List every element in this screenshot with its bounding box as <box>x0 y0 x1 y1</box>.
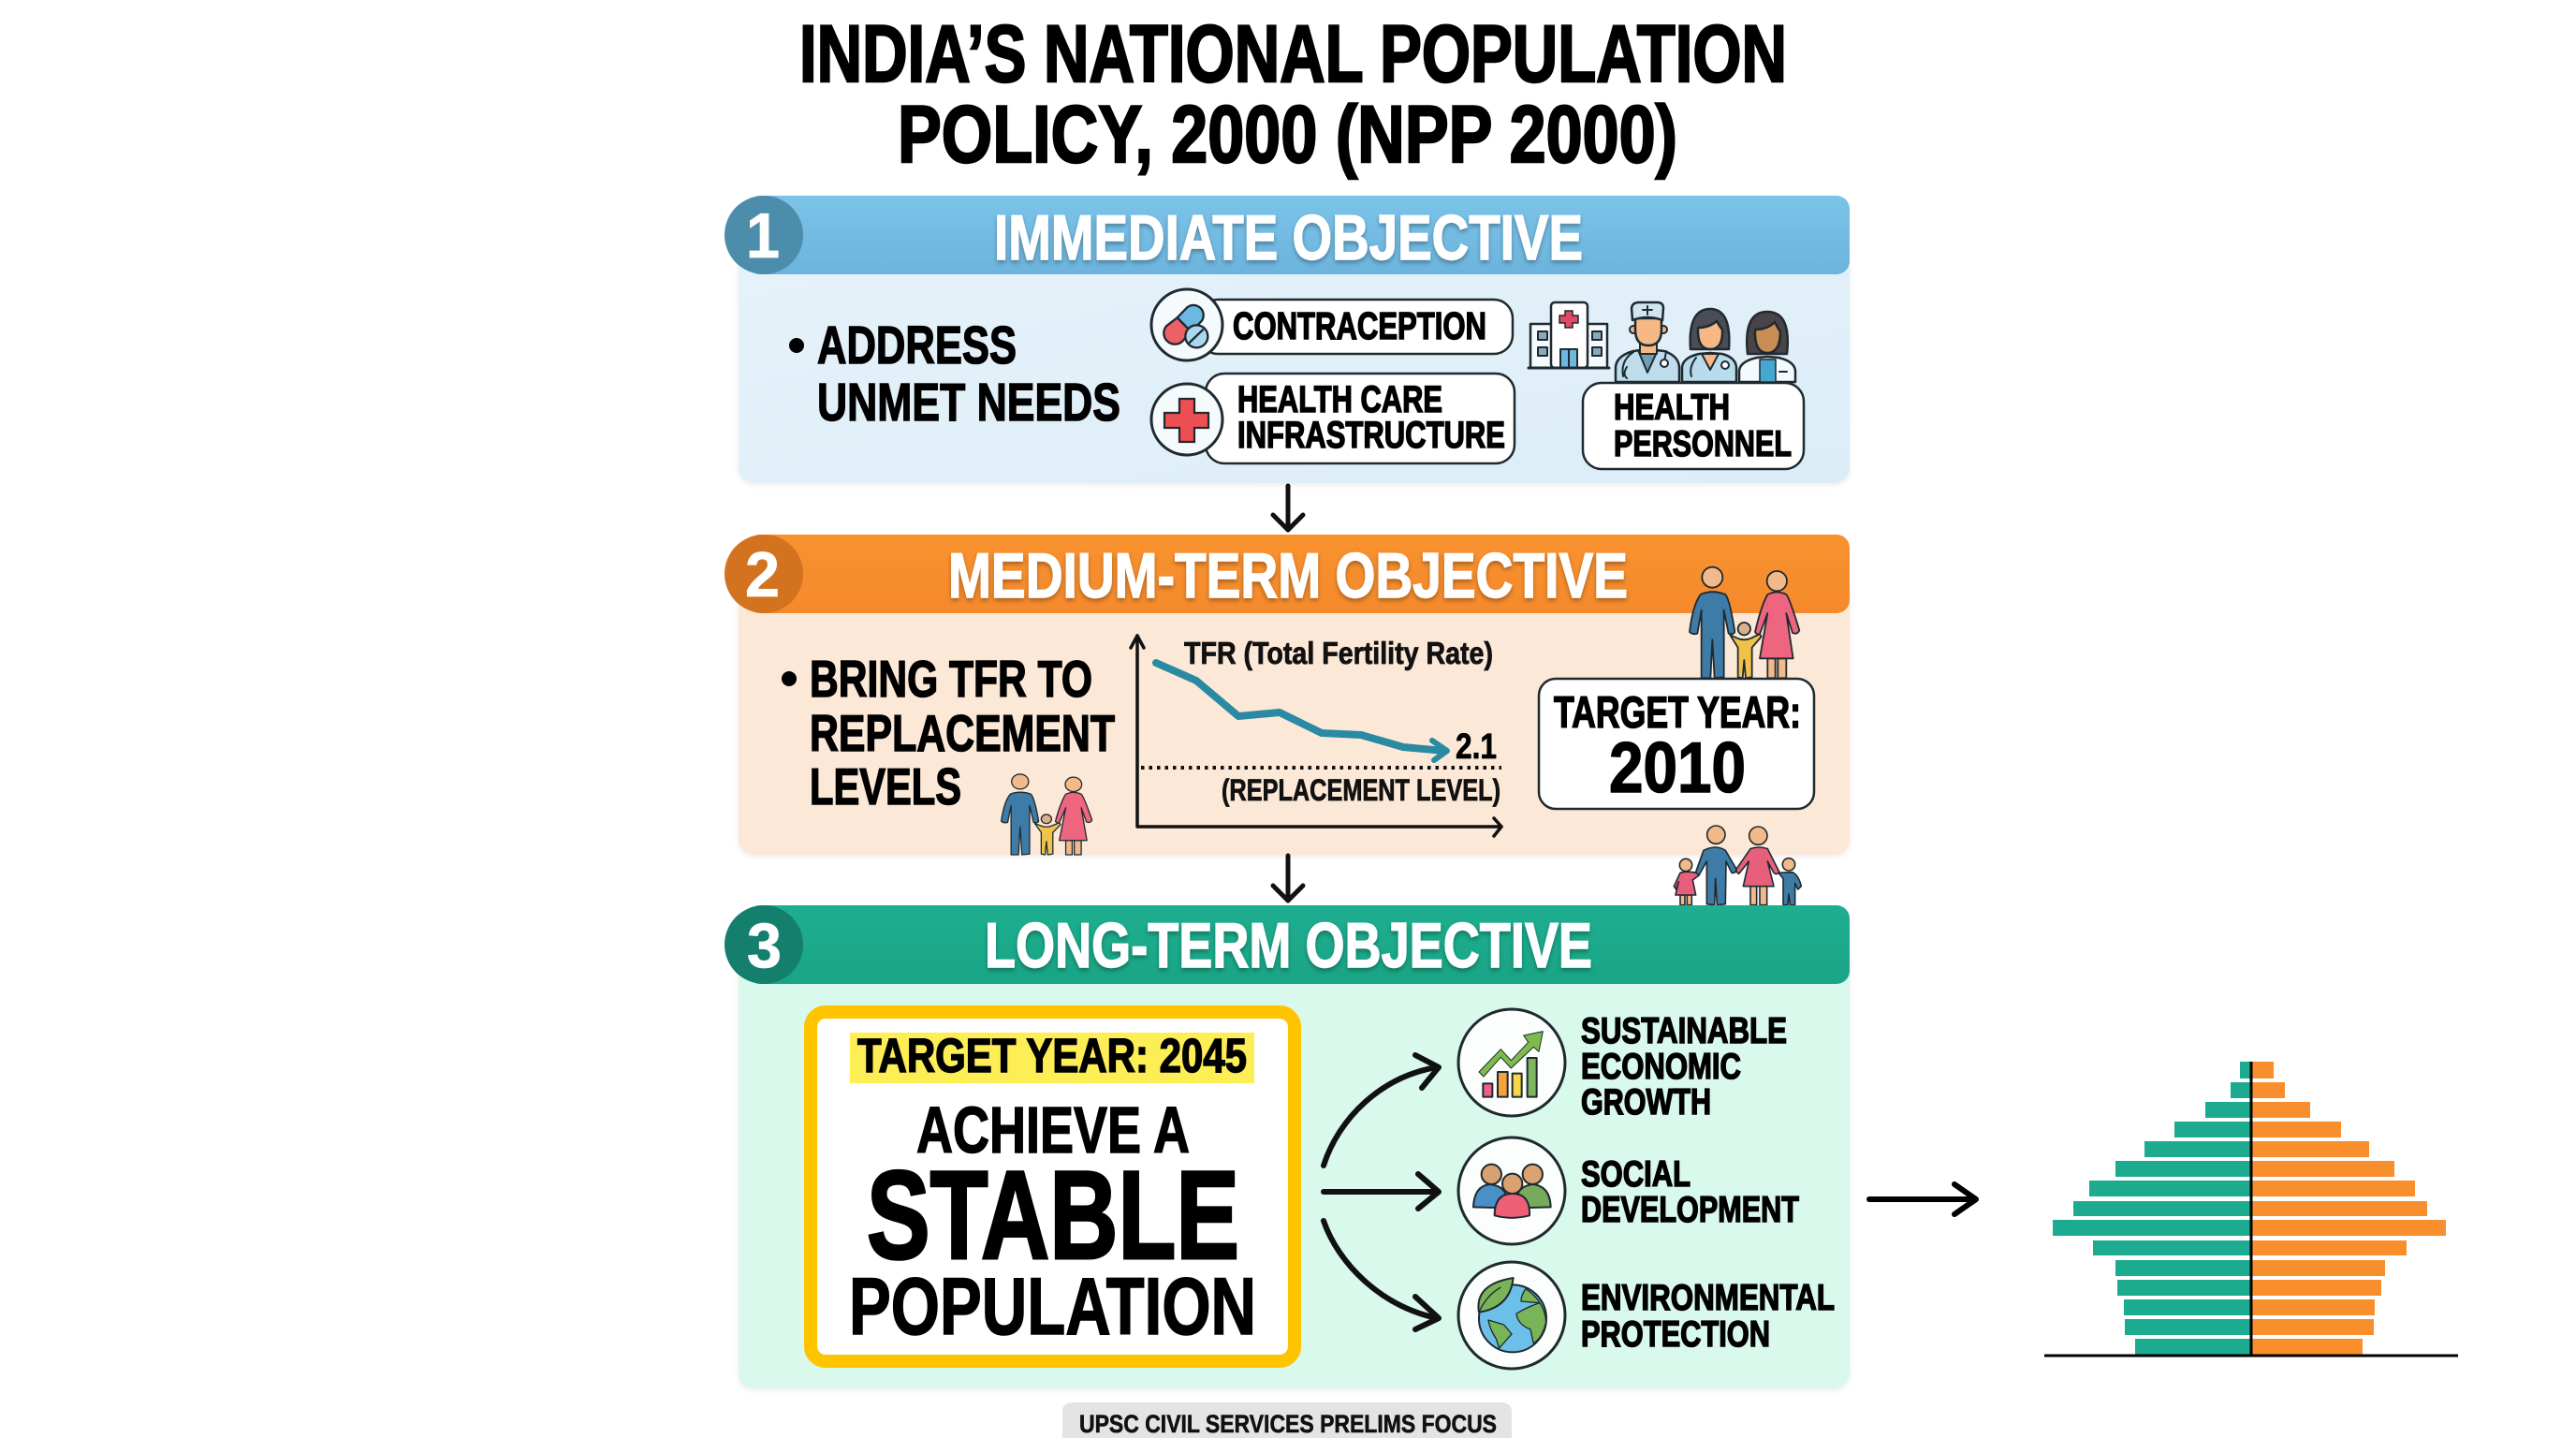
pyramid axes <box>2044 1062 2458 1356</box>
title <box>799 9 1787 180</box>
text: sustainable economic growth <box>1581 1011 1787 1123</box>
chart: TFR decline <box>1131 636 1501 836</box>
value 2.1: 2.1 <box>1456 727 1497 767</box>
text: sustainable economic growth: ECONOMIC <box>1581 1047 1741 1087</box>
target year box: TARGET YEAR: <box>1554 687 1801 737</box>
text: bring TFR to replacement levels: REPLACEMENT <box>810 704 1115 762</box>
footer tag: UPSC CIVIL SERVICES PRELIMS FOCUS <box>1079 1410 1497 1438</box>
pyramid left bars <box>2053 1062 2251 1355</box>
text: social development: DEVELOPMENT <box>1581 1190 1799 1230</box>
icon: female doctor <box>1682 309 1736 382</box>
text: sustainable economic growth: SUSTAINABLE <box>1581 1011 1787 1051</box>
health care infrastructure label: INFRASTRUCTURE <box>1237 415 1505 456</box>
text: address unmet needs: UNMET NEEDS <box>817 373 1120 433</box>
TFR trend line <box>1156 663 1447 760</box>
arrow: to economic growth <box>1324 1055 1439 1166</box>
chart axes <box>1131 636 1501 836</box>
panel 1 header <box>747 196 1850 274</box>
text: social development: SOCIAL <box>1581 1154 1690 1195</box>
icon: small family <box>1002 774 1092 855</box>
text: bring TFR to replacement levels: LEVELS <box>810 757 961 815</box>
panel: immediate objective <box>724 196 1850 483</box>
text: environmental protection: PROTECTION <box>1581 1314 1770 1355</box>
badge 3 <box>724 905 803 984</box>
icon: male doctor <box>1616 302 1679 382</box>
panel 3 body <box>739 946 1850 1388</box>
badge 3: 3 <box>747 910 782 981</box>
panel: long-term objective <box>724 905 1850 1388</box>
icon: environmental protection <box>1458 1262 1565 1369</box>
badge 2 <box>724 535 803 613</box>
footer tag <box>1062 1402 1512 1438</box>
icon: social development <box>1458 1137 1565 1244</box>
text: achieve a: ACHIEVE A <box>916 1093 1190 1167</box>
icon: red cross <box>1151 384 1222 455</box>
badge 2: 2 <box>745 539 780 610</box>
title: INDIA’S NATIONAL POPULATION <box>799 9 1787 99</box>
icon: doctor with white coat <box>1739 312 1795 382</box>
icon: pills <box>1151 289 1222 360</box>
contraception label: CONTRACEPTION <box>1233 304 1486 347</box>
health care infrastructure label <box>1206 374 1515 463</box>
arrow: panel 1 to panel 2 <box>1273 486 1303 530</box>
text: address unmet needs: ADDRESS <box>817 315 1017 375</box>
target year box <box>1539 679 1814 809</box>
title: POLICY, 2000 (NPP 2000) <box>898 90 1677 180</box>
health personnel label: HEALTH <box>1614 388 1730 428</box>
icon: hospital <box>1529 302 1609 368</box>
panel 3 heading: LONG-TERM OBJECTIVE <box>985 910 1592 981</box>
badge 1: 1 <box>746 200 780 271</box>
text: bring TFR to replacement levels: BRING TFR TO <box>810 650 1092 708</box>
target year box: 2010 <box>1609 728 1746 808</box>
text: stable: STABLE <box>867 1146 1239 1285</box>
arrow: panel 2 to panel 3 <box>1273 856 1303 901</box>
panel 2 body <box>739 580 1850 855</box>
text: environmental protection: ENVIRONMENTAL <box>1581 1278 1835 1318</box>
replacement level label: (REPLACEMENT LEVEL) <box>1222 773 1500 807</box>
panel: medium-term objective <box>724 535 1850 855</box>
panel 1 heading: IMMEDIATE OBJECTIVE <box>994 202 1583 273</box>
contraception label <box>1199 300 1513 354</box>
text: address unmet needs <box>789 315 1120 433</box>
arrow: to population pyramid <box>1869 1184 1976 1214</box>
icon: family of four <box>1674 826 1801 905</box>
callout: stable population <box>811 1012 1295 1361</box>
chart label: TFR (Total Fertility Rate) <box>1184 636 1493 670</box>
panel 1 body <box>739 253 1850 483</box>
arrow: to social development <box>1324 1174 1439 1209</box>
arrow: to environmental protection <box>1324 1221 1439 1329</box>
chart: population pyramid <box>2044 1062 2458 1356</box>
text: sustainable economic growth: GROWTH <box>1581 1082 1711 1123</box>
panel 2 heading: MEDIUM-TERM OBJECTIVE <box>948 540 1628 611</box>
panel 2 header <box>747 535 1850 613</box>
panel 3 header <box>747 905 1850 984</box>
icon: family on target box <box>1690 567 1799 678</box>
dotted replacement line <box>1141 766 1501 770</box>
health personnel label <box>1583 383 1804 469</box>
text: bring TFR to replacement levels <box>782 650 1115 815</box>
text: environmental protection <box>1581 1278 1835 1355</box>
icon: economic growth <box>1458 1009 1565 1116</box>
pyramid right bars <box>2251 1062 2446 1355</box>
text: population: POPULATION <box>849 1262 1256 1352</box>
badge 1 <box>724 196 803 274</box>
health personnel label: PERSONNEL <box>1614 424 1792 464</box>
highlight: target year 2045: TARGET YEAR: 2045 <box>857 1029 1247 1082</box>
health care infrastructure label: HEALTH CARE <box>1237 379 1442 420</box>
text: social development <box>1581 1154 1799 1230</box>
